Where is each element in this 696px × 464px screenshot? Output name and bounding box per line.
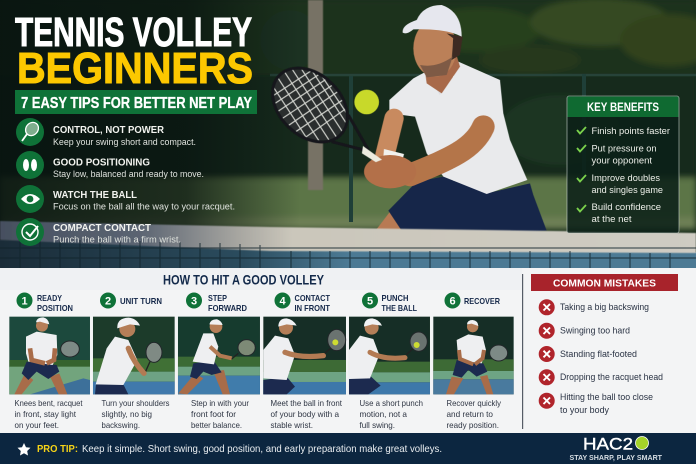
step 1 photo: ready position xyxy=(9,317,90,394)
step 3 header: FORWARD xyxy=(208,303,247,313)
mistakes list: Hitting the ball too close xyxy=(560,392,653,403)
tip: watch the ball: WATCH THE BALL xyxy=(53,189,138,201)
title xyxy=(15,9,253,93)
step captions: Use a short punch xyxy=(360,398,423,408)
step 2 header xyxy=(100,292,162,308)
shirt xyxy=(389,62,527,194)
panel: key benefits: Improve doubles xyxy=(592,173,660,184)
hands xyxy=(364,155,416,188)
panel: key benefits: KEY BENEFITS xyxy=(587,102,659,114)
racket frame and strings xyxy=(258,53,379,161)
pro tip text: Keep it simple. Short swing, good position, and early preparation make great volleys. xyxy=(82,443,442,455)
footer bar: pro tip xyxy=(0,433,696,464)
step captions: and return to xyxy=(446,409,493,419)
illustration: tennis player at net xyxy=(271,5,547,231)
step 6 photo: recover xyxy=(433,317,514,394)
panel: hero photo background xyxy=(0,0,696,268)
wristband xyxy=(383,149,404,164)
mistakes list: Standing flat-footed xyxy=(560,349,637,360)
step 2 header: 2 xyxy=(105,296,111,308)
panel: key benefits: Finish points faster xyxy=(592,126,670,137)
mistakes list xyxy=(560,302,663,416)
logo xyxy=(570,434,663,462)
back arm xyxy=(385,118,394,155)
mistakes header xyxy=(531,274,678,291)
step 5 header xyxy=(362,292,417,313)
step 1 header: READY xyxy=(37,293,62,303)
step 4 header: 4 xyxy=(279,296,286,308)
heading: HOW TO HIT A GOOD VOLLEY xyxy=(163,272,325,288)
front arm xyxy=(410,127,483,175)
logo: HAC2 xyxy=(583,434,633,454)
step 4 photo: contact in front xyxy=(263,317,346,394)
step captions: Recover quickly xyxy=(446,398,502,408)
tip: control, not power: Keep your swing short and compact. xyxy=(53,137,196,147)
subtitle banner: 7 EASY TIPS FOR BETTER NET PLAY xyxy=(21,95,252,112)
panel: how to hit a good volley xyxy=(0,268,522,433)
step captions: Knees bent, racquet xyxy=(14,398,83,408)
panel: key benefits: Build confidence xyxy=(592,202,661,213)
tip: good positioning: GOOD POSITIONING xyxy=(53,156,150,168)
panel: key benefits xyxy=(567,96,679,233)
step 4 header xyxy=(274,292,331,313)
step 1 header xyxy=(16,292,73,313)
tip: compact contact xyxy=(16,218,181,246)
step captions: better balance. xyxy=(191,420,242,430)
step 5 header: PUNCH xyxy=(382,293,408,303)
step captions: slightly, no big xyxy=(102,409,152,419)
tennis ball xyxy=(354,90,379,114)
step captions xyxy=(14,398,502,430)
tip: watch the ball xyxy=(16,185,235,213)
title: BEGINNERS xyxy=(17,44,253,93)
step captions: of your body with a xyxy=(270,409,339,419)
step 2 header: UNIT TURN xyxy=(120,296,162,306)
panel: key benefits: and singles game xyxy=(592,185,663,196)
step captions: front foot for xyxy=(191,409,236,419)
step 6 header: 6 xyxy=(449,296,456,308)
logo: STAY SHARP, PLAY SMART xyxy=(570,455,663,462)
step 2 photo: unit turn xyxy=(93,317,175,394)
step 4 header: CONTACT xyxy=(294,293,331,303)
panel: key benefits: Put pressure on xyxy=(592,144,656,154)
mistakes list: Dropping the racquet head xyxy=(560,372,663,383)
step 3 header: STEP xyxy=(208,293,227,303)
step captions: backswing. xyxy=(102,420,140,430)
mistakes list: to your body xyxy=(560,405,609,416)
panel: key benefits: at the net xyxy=(592,214,632,225)
step 3 header: 3 xyxy=(191,296,197,308)
step 3 photo: step forward xyxy=(178,317,260,394)
step 5 photo: punch the ball xyxy=(349,317,430,394)
panel: key benefits: your opponent xyxy=(592,156,652,166)
step 5 header: THE BALL xyxy=(382,303,417,313)
tip: watch the ball: Focus on the ball all the way to your racquet. xyxy=(53,202,235,212)
step 5 header: 5 xyxy=(367,296,373,308)
tip: compact contact: Punch the ball with a firm wrist. xyxy=(53,234,181,244)
tip: control, not power xyxy=(16,118,196,147)
step 3 header xyxy=(186,292,247,313)
step captions: Step in with your xyxy=(191,398,249,408)
shorts xyxy=(388,177,547,253)
tip: control, not power: CONTROL, NOT POWER xyxy=(53,124,164,136)
lower legs xyxy=(362,248,563,267)
mistake icons xyxy=(539,299,555,409)
tip: good positioning xyxy=(16,151,204,179)
panel: common mistakes xyxy=(522,268,696,433)
step captions: Meet the ball in front xyxy=(270,398,343,408)
step captions: full swing. xyxy=(360,420,395,430)
tip: good positioning: Stay low, balanced and ready to move. xyxy=(53,169,204,179)
step captions: motion, not a xyxy=(360,409,407,419)
step 1 header: 1 xyxy=(21,296,28,308)
icon: ball logo xyxy=(636,436,648,450)
step 6 header: RECOVER xyxy=(464,296,500,306)
icon: star xyxy=(18,443,30,456)
step captions: stable wrist. xyxy=(270,420,313,430)
step captions: Turn your shoulders xyxy=(102,398,170,408)
cap xyxy=(403,5,462,37)
tip: compact contact: COMPACT CONTACT xyxy=(53,222,152,234)
subtitle banner xyxy=(15,90,257,114)
step 6 header xyxy=(444,292,500,308)
step captions: ready position. xyxy=(446,420,499,430)
step captions: on your feet. xyxy=(14,420,59,430)
neck and head xyxy=(424,50,460,93)
step 4 header: IN FRONT xyxy=(294,303,331,313)
title: TENNIS VOLLEY xyxy=(15,9,252,55)
step captions: in front, stay light xyxy=(14,409,77,419)
step 1 header: POSITION xyxy=(37,303,73,313)
mistakes list: Taking a big backswing xyxy=(560,302,649,313)
mistakes header: COMMON MISTAKES xyxy=(553,278,656,290)
pro tip label: PRO TIP: xyxy=(37,443,78,455)
mistakes list: Swinging too hard xyxy=(560,326,630,336)
net xyxy=(0,221,696,268)
